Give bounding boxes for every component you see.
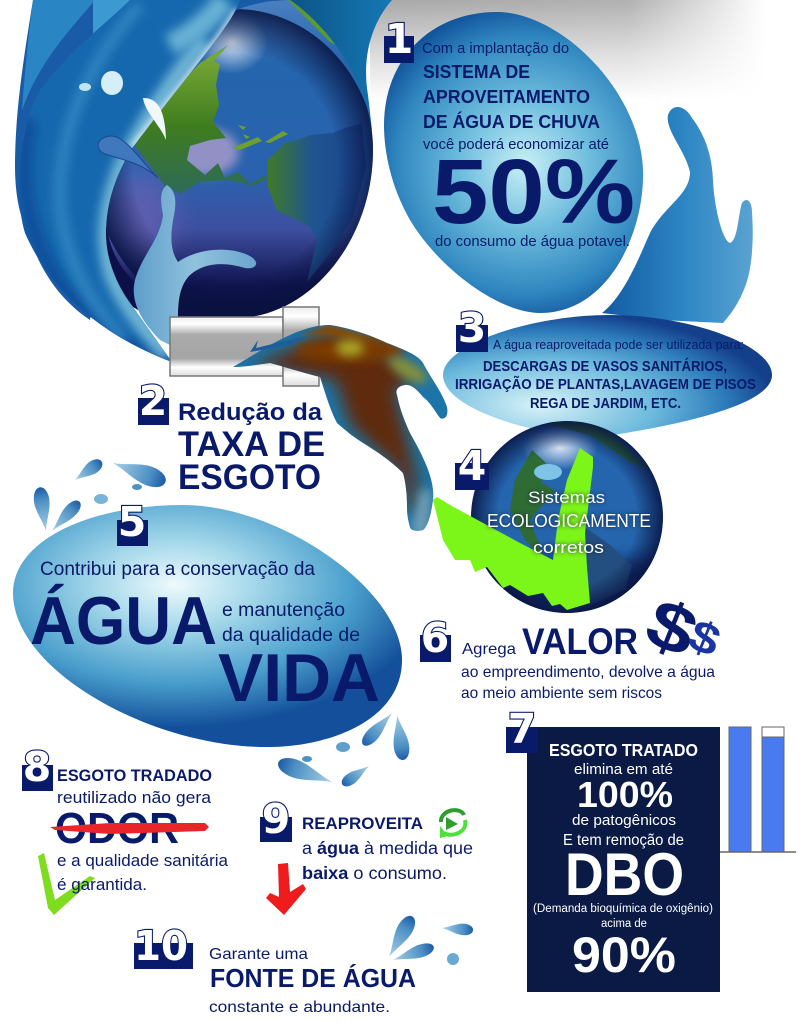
badge 9: 9 <box>262 795 290 843</box>
panel 7: treated sewage stats: DBO <box>565 841 684 908</box>
icon: dollar signs: $ <box>682 610 727 667</box>
islands <box>232 125 288 150</box>
pipe <box>170 307 319 386</box>
panel 5: water conservation bubble: e manutenção <box>222 600 345 621</box>
section 9: reuse: REAPROVEITA <box>302 814 423 833</box>
section 9: reuse: baixa o consumo. <box>302 863 447 883</box>
blue stream over globe <box>134 185 256 345</box>
section 9: reuse: a água à medida que <box>302 838 473 858</box>
section 2: sewage fee: Redução da <box>178 399 323 426</box>
panel 3: reuse bubble <box>443 315 772 437</box>
section 9: reuse <box>260 795 473 915</box>
section 6: added value: ao empreendimento, devolve a água <box>461 664 715 681</box>
globe text: Sistemas <box>528 489 605 507</box>
bar chart: 100% and 90% <box>720 727 796 852</box>
front water swirl <box>20 0 240 361</box>
section 8: no odor: e a qualidade sanitária <box>57 851 229 870</box>
section 8: no odor: é garantida. <box>57 875 147 894</box>
badge 2: 2 <box>139 377 167 425</box>
section 6: added value: Agrega <box>462 641 516 658</box>
big number 50%: 50% <box>432 141 635 243</box>
section 6: added value: VALOR <box>522 620 638 662</box>
panel 7: treated sewage stats: 100% <box>577 774 673 815</box>
section 6: added value <box>420 584 727 702</box>
section 8: no odor: reutilizado não gera <box>57 789 212 807</box>
icon: recycle arrows <box>440 810 465 838</box>
panel 7: treated sewage stats: 90% <box>572 927 676 983</box>
splash drops around panel 5 <box>32 454 169 535</box>
panel 7: treated sewage stats: elimina em até <box>574 761 673 778</box>
panel 5: water conservation bubble: ÁGUA <box>30 583 217 659</box>
panel 1: rainwater savings bubble <box>384 12 643 313</box>
badge 4: 4 <box>458 442 486 490</box>
section 2: sewage fee <box>138 377 325 497</box>
heading text: APROVEITAMENTO <box>423 86 590 107</box>
panel 7: treated sewage stats <box>527 727 720 992</box>
badge 8: 8 <box>23 743 51 791</box>
panel 7: treated sewage stats: E tem remoção de <box>563 832 684 849</box>
heading text: você poderá economizar até <box>423 136 609 153</box>
globe edge shading <box>93 9 377 321</box>
illustration: earth globe wrapped in water <box>0 0 392 370</box>
red strike through <box>50 823 209 834</box>
panel 5: water conservation bubble: VIDA <box>218 640 380 716</box>
caption: do consumo de água potavel. <box>435 233 630 250</box>
continent: greenland edge <box>288 0 336 45</box>
continent: south america <box>268 123 366 282</box>
panel 7: treated sewage stats: (Demanda bioquímica de oxigênio) <box>533 903 713 915</box>
panel 5: water conservation bubble: da qualidade de <box>222 625 360 646</box>
section 10: water source: Garante uma <box>209 946 308 963</box>
section 10: water source <box>134 922 416 1016</box>
panel 7: treated sewage stats: de patogênicos <box>572 812 676 829</box>
badge 10: 10 <box>134 922 188 970</box>
globe <box>106 0 373 316</box>
panel 5: water conservation bubble: Contribui para a conservação da <box>40 558 315 580</box>
reuse text: DESCARGAS DE VASOS SANITÁRIOS, <box>483 358 727 375</box>
icon: dollar signs: $ <box>635 584 708 672</box>
section 8: no odor <box>22 743 229 915</box>
badge 6: 6 <box>421 614 449 662</box>
panel 7: treated sewage stats: acima de <box>601 918 647 930</box>
badge 1: 1 <box>385 15 413 63</box>
reuse text <box>455 338 756 412</box>
badge 7: 7 <box>508 705 536 753</box>
droplets on the swirl <box>79 71 166 178</box>
grey background haze <box>370 0 800 100</box>
sewage flow <box>233 325 448 531</box>
section 8: no odor: ODOR <box>55 804 179 853</box>
globe text: ECOLOGICAMENTE <box>487 511 651 531</box>
dark teal swirl <box>275 0 392 130</box>
heading text: Com a implantação do <box>422 40 569 57</box>
splash drops near section 10 <box>382 913 473 966</box>
panel 5: water conservation bubble <box>13 505 402 747</box>
reuse text: IRRIGAÇÃO DE PLANTAS,LAVAGEM DE PISOS <box>455 375 756 393</box>
water splash on the right <box>602 107 753 323</box>
section 2: sewage fee: TAXA DE <box>178 425 325 464</box>
reuse text: REGA DE JARDIM, ETC. <box>530 396 681 412</box>
continent: north america <box>133 45 268 194</box>
section 2: sewage fee: ESGOTO <box>178 458 321 497</box>
splash drops below panel 5 <box>275 709 411 791</box>
icon: green check <box>38 853 95 915</box>
icon: red down arrow <box>266 863 306 915</box>
heading text: SISTEMA DE <box>423 61 530 82</box>
small blue arrow in pipe <box>250 335 310 352</box>
badge 3: 3 <box>458 304 486 352</box>
section 8: no odor: ESGOTO TRADADO <box>57 766 212 785</box>
globe text <box>487 489 651 557</box>
badge 5: 5 <box>118 498 146 546</box>
panel 4: small globe with green check <box>433 421 663 615</box>
section 10: water source: FONTE DE ÁGUA <box>210 963 416 993</box>
panel 7: treated sewage stats: ESGOTO TRATADO <box>549 740 698 760</box>
green check mark <box>433 448 593 610</box>
heading text <box>422 40 609 153</box>
back water swirl <box>15 0 290 320</box>
reuse text: A água reaproveitada pode ser utilizada para: <box>493 338 744 352</box>
section 10: water source: constante e abundante. <box>209 999 390 1016</box>
globe text: corretos <box>533 539 604 557</box>
heading text: DE ÁGUA DE CHUVA <box>423 111 600 132</box>
section 6: added value: ao meio ambiente sem riscos <box>461 685 662 702</box>
